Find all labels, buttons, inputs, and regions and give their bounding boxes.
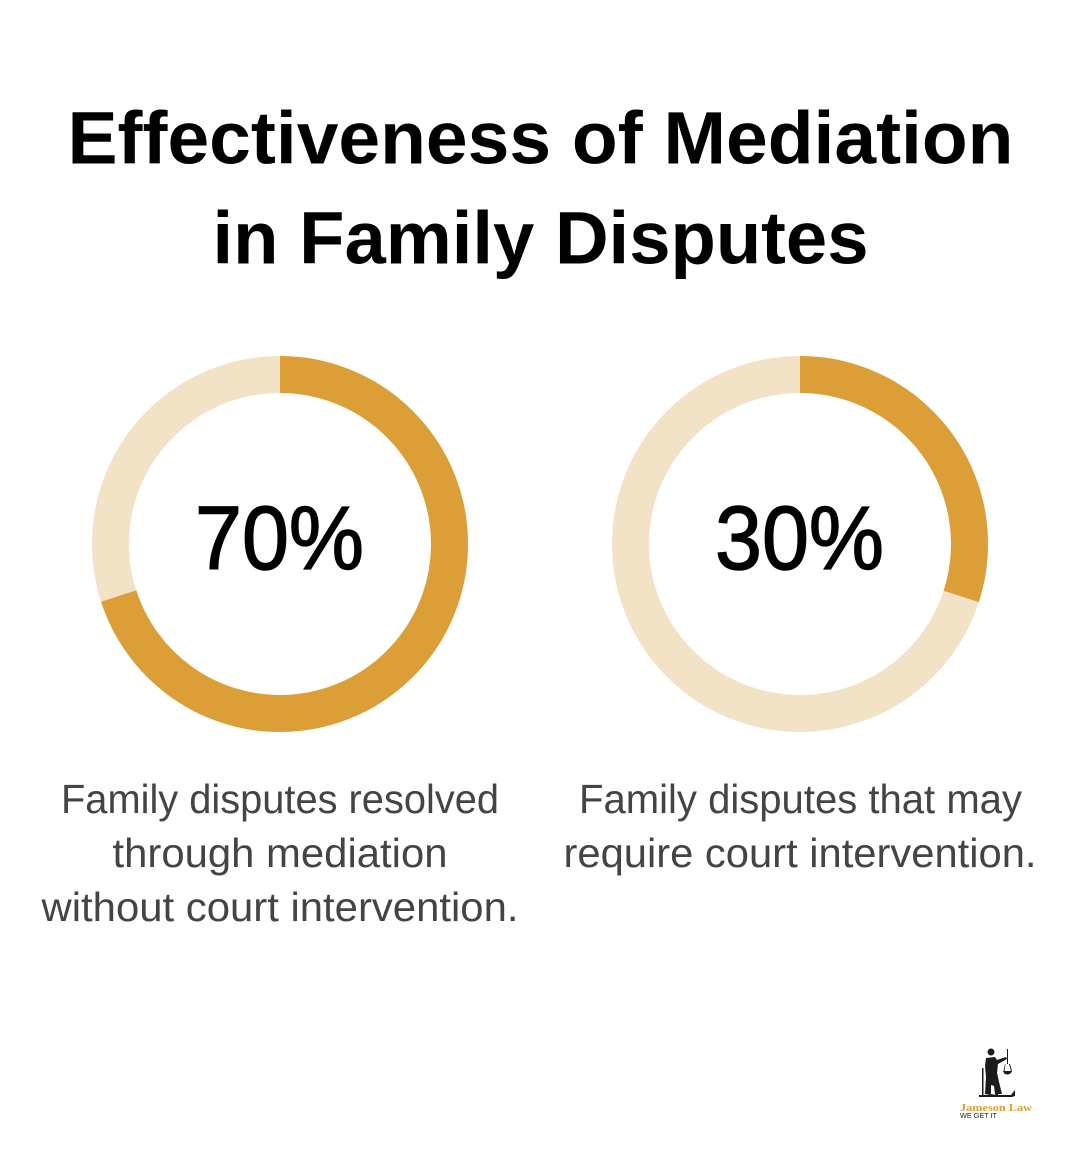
title: Effectiveness of Mediation	[68, 96, 1014, 180]
description: 30%: Family disputes that may	[579, 776, 1022, 822]
logo name: Jameson Law	[960, 1103, 1032, 1114]
description: 70%: through mediation	[112, 830, 447, 876]
donut chart: 70%	[110, 374, 450, 714]
icon: lady justice	[979, 1048, 1015, 1097]
panel: 70% resolved through mediation	[40, 374, 518, 930]
stat: 30%: 30%	[715, 489, 884, 589]
panel: 30% may require court	[564, 374, 1036, 876]
description: 30%: require court intervention.	[564, 830, 1036, 876]
title: in Family Disputes	[212, 196, 868, 280]
donut chart: 30%	[630, 374, 970, 714]
logo: Jameson Law	[960, 1048, 1032, 1120]
stat: 70%: 70%	[195, 489, 364, 589]
title	[68, 96, 1014, 280]
description: 70%: Family disputes resolved	[61, 776, 499, 822]
description: 70%	[40, 776, 518, 930]
description: 70%: without court intervention.	[40, 884, 518, 930]
logo tagline: WE GET IT	[960, 1113, 998, 1120]
description: 30%	[564, 776, 1036, 876]
